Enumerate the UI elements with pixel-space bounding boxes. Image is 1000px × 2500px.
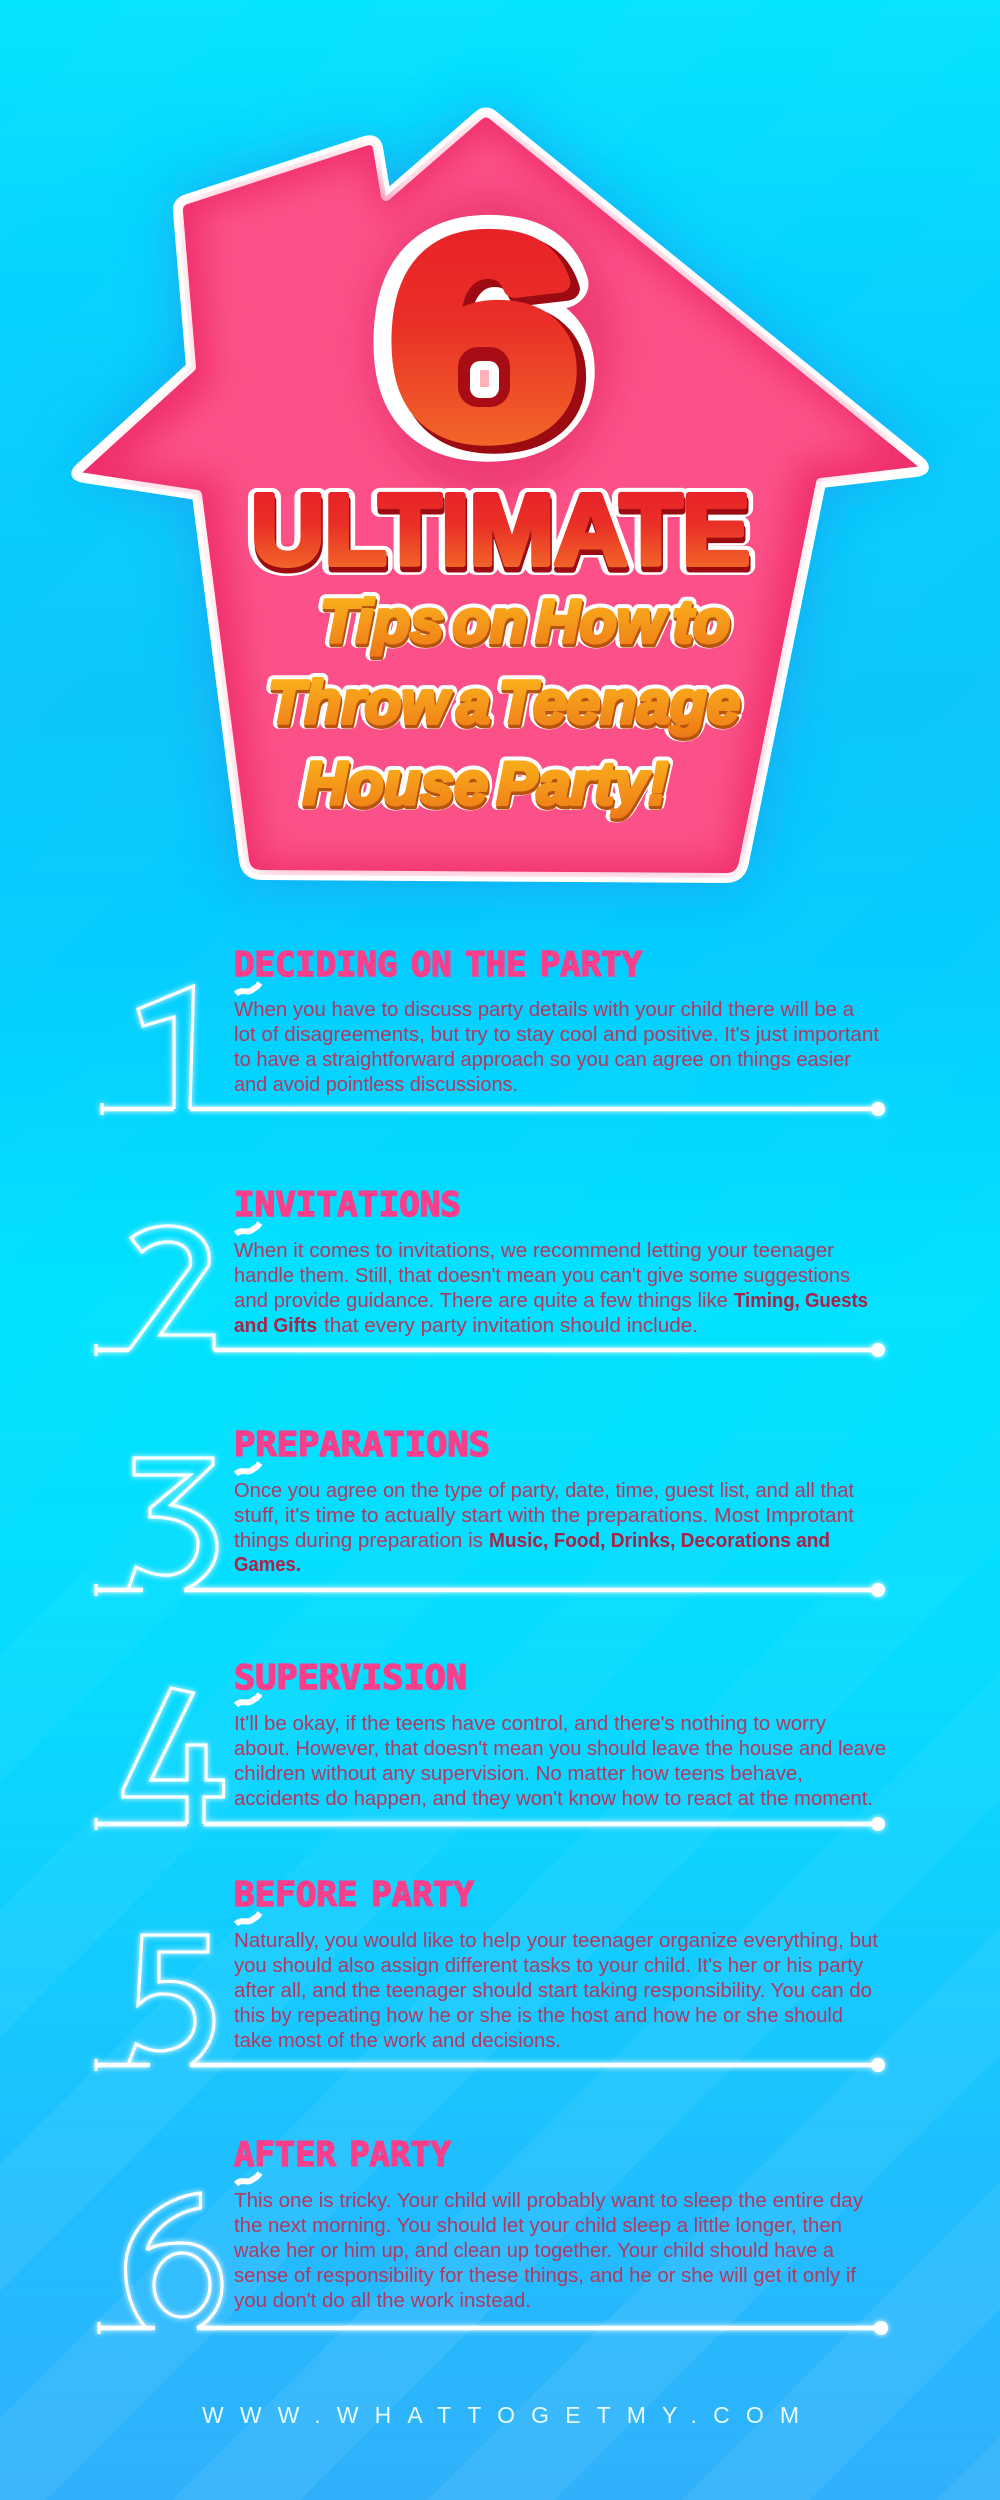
section 4: supervision — [96, 1658, 886, 1831]
neon numeral 6 and baseline — [99, 2193, 888, 2335]
body text: sense of responsibility for these things, and he or she will get it only if — [234, 2265, 856, 2287]
neon numeral 2 and baseline — [96, 1226, 885, 1357]
body text: children without any supervision. No matter how teens behave, — [234, 1763, 803, 1785]
body text — [234, 1930, 878, 2052]
subheading: tips on how to throw a teenage house party: Throw a Teenage — [268, 669, 740, 736]
body text: and provide guidance. There are quite a few things like — [234, 1290, 728, 1312]
heading: ULTIMATE: ULTIMATE — [252, 479, 751, 591]
section 6: after party — [99, 2135, 888, 2335]
subheading: tips on how to throw a teenage house party — [268, 588, 741, 820]
body text: to have a straightforward approach so you can agree on things easier — [234, 1049, 851, 1071]
subheading: tips on how to throw a teenage house party: Throw a Teenage — [269, 672, 741, 739]
squiggle — [236, 1694, 260, 1705]
body text — [233, 2190, 863, 2312]
body text: you don't do all the work instead. — [234, 2290, 531, 2312]
neon numeral 5 and baseline — [96, 1935, 885, 2072]
neon numeral 3 and baseline — [96, 1458, 885, 1597]
heading: PREPARATIONS — [234, 1425, 490, 1465]
body text: about. However, that doesn't mean you should leave the house and leave — [234, 1738, 886, 1760]
section 1: deciding on the party — [102, 945, 885, 1116]
neon numeral 4 and baseline — [96, 1688, 885, 1831]
heading: DECIDING ON THE PARTY — [234, 945, 643, 985]
heading: SUPERVISION — [234, 1658, 467, 1698]
subheading: tips on how to throw a teenage house party: House Party! — [304, 753, 669, 820]
heading: ULTIMATE: ULTIMATE — [251, 474, 750, 586]
heading: INVITATIONS — [234, 1185, 461, 1225]
body text: Music, Food, Drinks, Decorations and — [489, 1530, 830, 1552]
body text — [234, 999, 879, 1096]
body text: It'll be okay, if the teens have control, and there's nothing to worry — [234, 1713, 826, 1735]
body text: that every party invitation should include. — [324, 1315, 698, 1337]
body text: Once you agree on the type of party, date, time, guest list, and all that — [234, 1480, 854, 1502]
body text: you should also assign different tasks to your child. It's her or his party — [234, 1955, 863, 1977]
heading: ULTIMATE: ULTIMATE — [251, 476, 750, 588]
squiggle — [236, 2173, 260, 2184]
body text: Games. — [234, 1554, 301, 1576]
subheading: tips on how to throw a teenage house party: House Party! — [303, 750, 668, 817]
big number 6: 6 — [391, 183, 577, 494]
house glow — [73, 107, 928, 880]
squiggle — [236, 1223, 260, 1234]
body text: When it comes to invitations, we recommend letting your teenager — [234, 1240, 834, 1262]
house lighter interior — [120, 130, 885, 862]
body text: Timing, Guests — [734, 1290, 868, 1312]
body text: Naturally, you would like to help your teenager organize everything, but — [234, 1930, 878, 1952]
house shape — [76, 112, 924, 878]
body text: take most of the work and decisions. — [234, 2030, 561, 2052]
body text — [234, 1240, 868, 1337]
squiggle — [236, 1913, 260, 1924]
subheading: tips on how to throw a teenage house party: Throw a Teenage — [268, 669, 740, 736]
footer website: WWW.WHATTOGETMY.COM — [202, 2402, 799, 2428]
body text — [234, 1480, 854, 1576]
body text: When you have to discuss party details with your child there will be a — [234, 999, 855, 1021]
big number 6: 6 — [391, 182, 577, 493]
section 5: before party — [96, 1875, 885, 2072]
section 2: invitations — [96, 1185, 885, 1357]
subheading: tips on how to throw a teenage house party: House Party! — [303, 750, 668, 817]
body text — [234, 1713, 886, 1810]
body text: and avoid pointless discussions. — [234, 1074, 518, 1096]
big number 6: 6 — [398, 188, 584, 499]
body text: wake her or him up, and clean up together. Your child should have a — [233, 2240, 835, 2262]
neon numeral 1 and baseline — [102, 986, 885, 1116]
house title panel — [73, 107, 928, 880]
background stripes — [0, 1710, 1000, 2500]
counter of the 6 — [458, 347, 510, 407]
squiggle — [236, 1463, 260, 1474]
body text: and Gifts — [234, 1315, 317, 1337]
body text: stuff, it's time to actually start with the preparations. Most Improtant — [234, 1505, 854, 1527]
body text: lot of disagreements, but try to stay cool and positive. It's just important — [234, 1024, 879, 1046]
heading: AFTER PARTY — [234, 2135, 452, 2175]
section 3: preparations — [96, 1425, 885, 1597]
body text: handle them. Still, that doesn't mean you can't give some suggestions — [234, 1265, 850, 1287]
subheading: tips on how to throw a teenage house party: Tips on How to — [321, 591, 731, 658]
subheading: tips on how to throw a teenage house party: Tips on How to — [320, 588, 730, 655]
body text: This one is tricky. Your child will probably want to sleep the entire day — [234, 2190, 863, 2212]
subheading: tips on how to throw a teenage house party: Tips on How to — [320, 588, 730, 655]
heading: BEFORE PARTY — [234, 1875, 475, 1915]
body text: things during preparation is — [234, 1530, 483, 1552]
body text: the next morning. You should let your child sleep a little longer, then — [234, 2215, 842, 2237]
body text: accidents do happen, and they won't know how to react at the moment. — [234, 1788, 873, 1810]
body text: after all, and the teenager should start taking responsibility. You can do — [234, 1980, 872, 2002]
body text: this by repeating how he or she is the host and how he or she should — [234, 2005, 843, 2027]
squiggle — [236, 983, 260, 994]
